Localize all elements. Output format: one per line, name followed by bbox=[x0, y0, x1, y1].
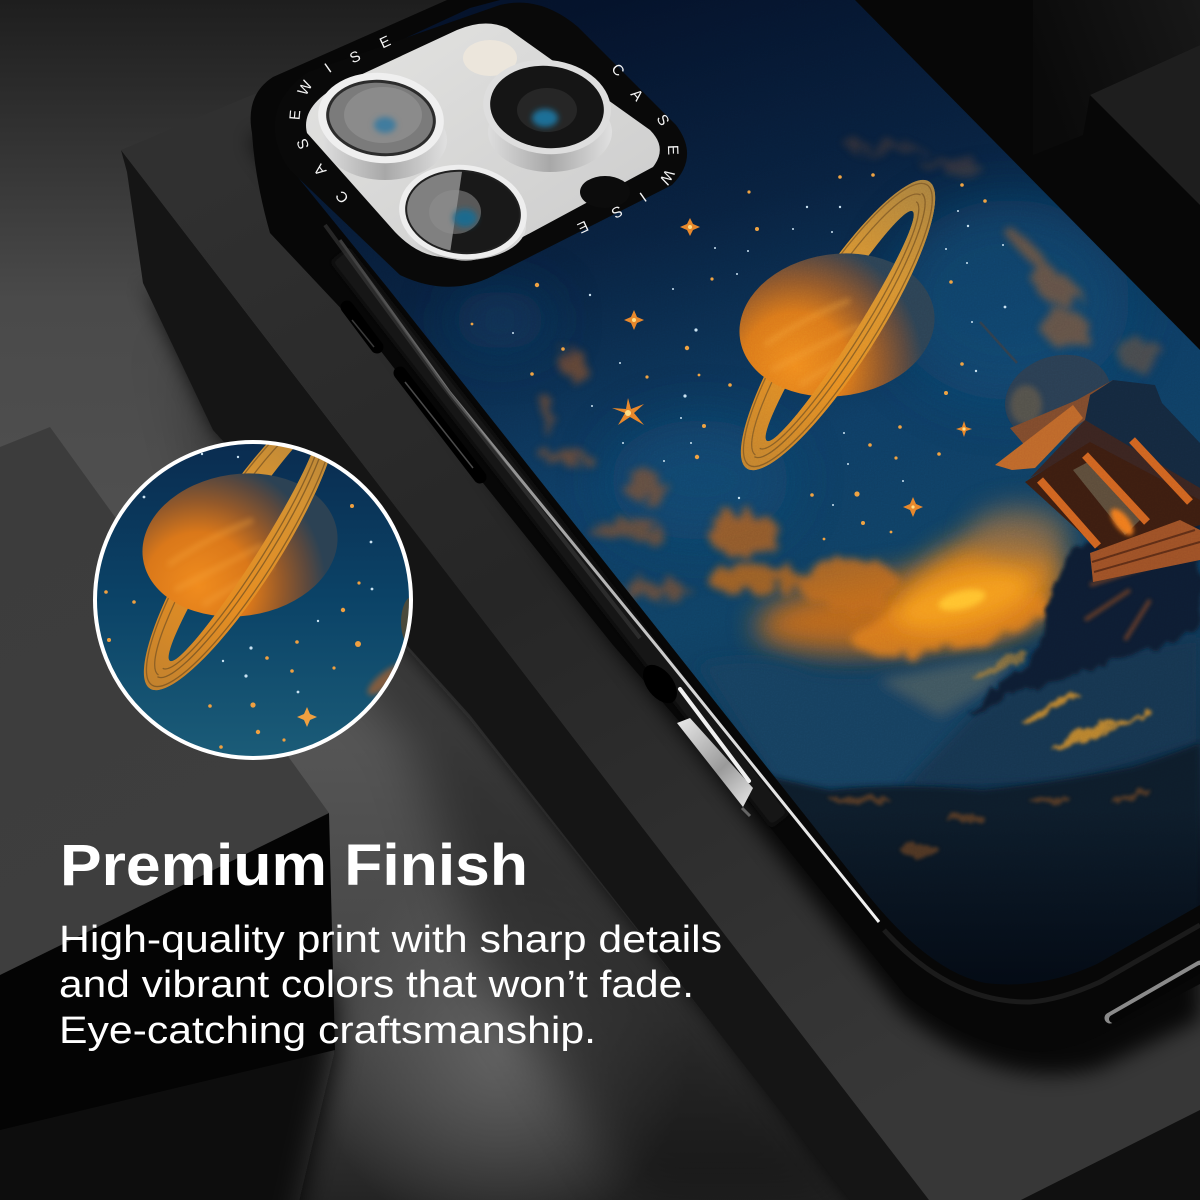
phone shadow bbox=[250, 0, 1200, 1075]
temple lit columns bbox=[1040, 440, 1190, 546]
front block lower soft shade bbox=[0, 980, 335, 1200]
phone case bbox=[251, 0, 1200, 1052]
dark cliff under temple bbox=[970, 520, 1200, 715]
casewise ring text: E bbox=[664, 145, 681, 155]
temple base stripes bbox=[1092, 530, 1200, 572]
silver side button bbox=[636, 659, 753, 816]
floor shadow along platform bbox=[170, 330, 860, 1200]
temple upper stripes bbox=[1010, 380, 1113, 444]
circle stars white bbox=[143, 453, 373, 693]
casewise ring text: S bbox=[653, 112, 672, 129]
casewise ring text: E bbox=[287, 109, 304, 121]
camera island bbox=[275, 3, 687, 287]
casewise ring text: S bbox=[294, 136, 313, 151]
saturn on phone bbox=[713, 160, 963, 490]
top right dark block bbox=[1033, 0, 1200, 205]
temple spire bbox=[980, 322, 1017, 363]
sunset clouds bbox=[705, 513, 1053, 668]
casewise ring text: W bbox=[655, 166, 677, 188]
wispy clouds left bbox=[539, 349, 692, 598]
floor light pool bbox=[240, 860, 760, 1200]
sky base bbox=[299, 0, 1200, 854]
casewise ring text: E bbox=[575, 217, 591, 236]
temple arch opening bbox=[1073, 462, 1140, 535]
star sparkle cores bbox=[625, 225, 966, 509]
circle orange cloud wisps bbox=[364, 660, 406, 700]
temple dome lit side bbox=[1010, 385, 1042, 425]
lens top left bbox=[314, 67, 448, 180]
wispy clouds upper right bbox=[847, 143, 1164, 371]
foreground orange smudges bbox=[830, 785, 1150, 855]
platform side shadow bbox=[143, 283, 930, 1200]
sea reflections bbox=[972, 647, 1151, 755]
casewise ring text: S bbox=[608, 202, 625, 221]
dark foreground land bbox=[772, 742, 1200, 922]
body text: Eye-catching craftsmanship. bbox=[59, 1010, 596, 1052]
circle saturn bbox=[116, 380, 366, 710]
flash bbox=[463, 40, 517, 76]
casewise ring text: A bbox=[627, 86, 646, 105]
temple inner glow bbox=[1107, 505, 1137, 539]
sun glow bbox=[889, 560, 1037, 640]
circle stars orange bbox=[104, 504, 361, 749]
casewise ring text: E bbox=[377, 33, 393, 52]
sun core bbox=[938, 588, 986, 612]
front block bbox=[0, 427, 335, 1200]
cloud banks below sunset bbox=[710, 648, 1022, 788]
microphone hole bbox=[580, 176, 630, 208]
temple columns body bbox=[1025, 442, 1200, 555]
island black ring bbox=[275, 3, 687, 287]
zoom detail circle bbox=[95, 380, 425, 758]
circle dome fragment bbox=[401, 596, 425, 648]
casewise ring text: I bbox=[636, 188, 649, 205]
stars orange bbox=[471, 173, 987, 540]
temple bbox=[980, 322, 1200, 582]
stars white bbox=[512, 206, 1006, 506]
temple upper roof bbox=[1085, 380, 1200, 490]
casewise ring text: I bbox=[322, 60, 335, 77]
sea behind bbox=[912, 643, 1198, 784]
painted canvas grain bbox=[260, 0, 1200, 1000]
front block dark face bbox=[0, 813, 335, 1130]
body text bbox=[59, 919, 722, 1052]
case body bbox=[251, 0, 1200, 1052]
casewise ring text: C bbox=[608, 61, 628, 80]
heading: Premium Finish bbox=[60, 833, 528, 898]
side button slot long bbox=[400, 373, 480, 477]
lens top right bbox=[478, 54, 616, 172]
sky nebula glows bbox=[450, 200, 1130, 540]
temple frieze bbox=[1030, 420, 1200, 505]
cliff orange streaks bbox=[1085, 565, 1150, 640]
sunset broad glow bbox=[752, 505, 1077, 665]
front block top face bbox=[0, 427, 329, 975]
platform side face bbox=[121, 150, 929, 1200]
casewise ring text: S bbox=[347, 48, 363, 67]
charging port bbox=[1110, 966, 1200, 1019]
side button slot small bbox=[347, 307, 377, 347]
block top face bbox=[1090, 45, 1200, 205]
temple dome bbox=[1005, 354, 1110, 440]
foreground fade bbox=[849, 864, 1200, 984]
circle white border bbox=[95, 442, 411, 758]
case rim dim glare bbox=[325, 225, 640, 638]
casewise ring text: A bbox=[311, 161, 330, 179]
case side band bbox=[340, 255, 780, 820]
temple base bbox=[1090, 520, 1200, 582]
temple cornice bbox=[995, 405, 1083, 470]
printed artwork bbox=[260, 0, 1200, 1040]
case lower rim bbox=[884, 925, 1200, 1002]
casewise ring text: C bbox=[332, 187, 352, 206]
lower right dark corner bbox=[1021, 1110, 1200, 1200]
reflection panel bbox=[1033, 0, 1200, 155]
case rim glare bbox=[340, 240, 879, 922]
circle artwork bbox=[95, 380, 425, 758]
lens bottom bbox=[394, 159, 532, 265]
island glass plate bbox=[306, 23, 660, 261]
casewise ring text bbox=[287, 33, 681, 236]
star sparkles bbox=[612, 218, 972, 517]
body text: and vibrant colors that won’t fade. bbox=[59, 964, 694, 1006]
circle sky bbox=[95, 442, 411, 758]
body text: High-quality print with sharp details bbox=[59, 919, 722, 961]
casewise ring text: W bbox=[295, 77, 317, 99]
